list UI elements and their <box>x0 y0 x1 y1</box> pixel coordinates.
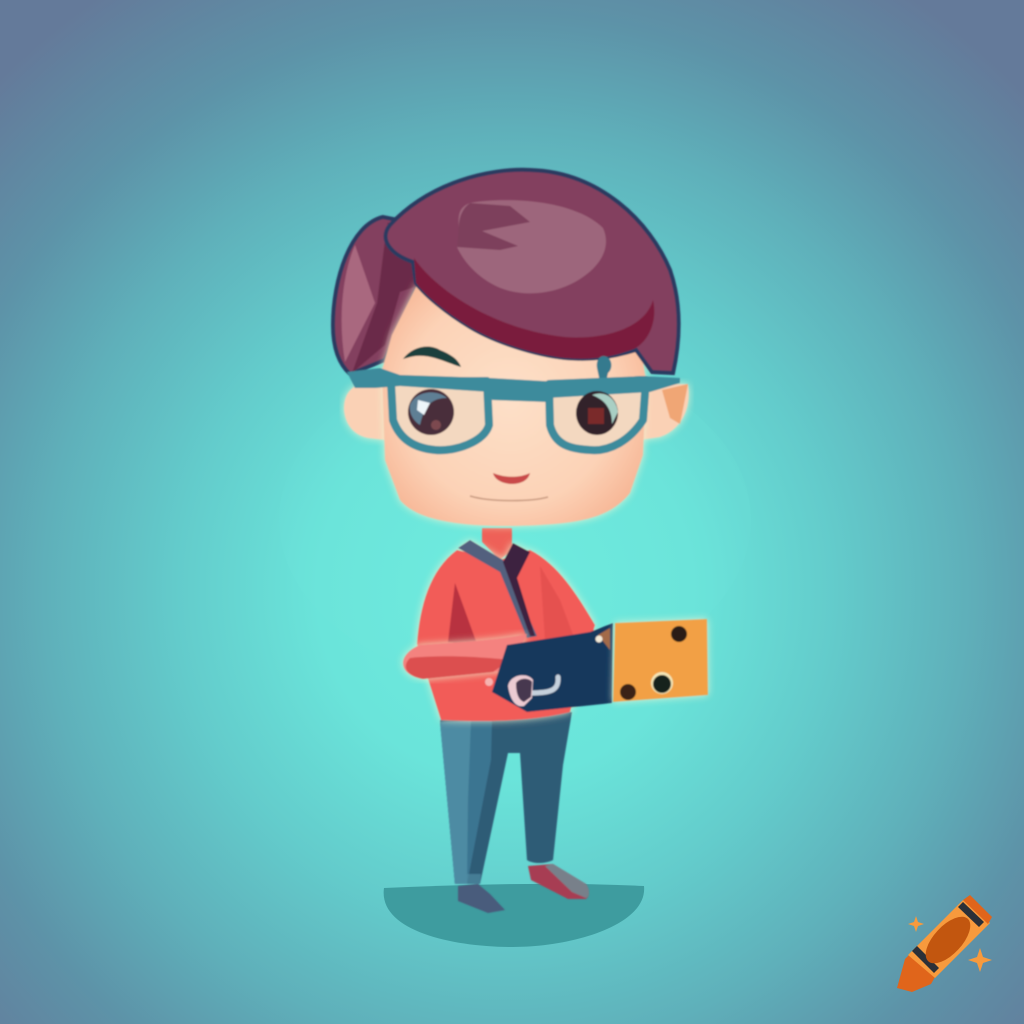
ear right <box>640 384 689 440</box>
top bar and bridge <box>347 368 680 402</box>
legs and trousers <box>440 712 572 884</box>
crayon end cap <box>963 895 992 924</box>
crayon body <box>908 900 990 978</box>
device clip rivet <box>596 636 602 642</box>
shirt <box>417 540 595 721</box>
crayon tip <box>897 952 935 992</box>
chin line <box>470 496 548 501</box>
right eye <box>576 391 618 435</box>
right lens <box>549 380 646 450</box>
hair highlight notch <box>457 203 530 250</box>
hair top <box>386 170 679 373</box>
hand and handle <box>485 675 558 706</box>
ground shadow <box>384 884 644 947</box>
logo: crayon <box>897 895 992 992</box>
face <box>382 283 646 526</box>
crayon bands <box>912 946 939 973</box>
board hole top <box>671 626 687 642</box>
neck <box>482 528 512 560</box>
board hole lens <box>651 672 673 694</box>
hair back lobe <box>333 217 420 374</box>
crayon oval <box>918 909 978 971</box>
hair highlight <box>457 200 606 293</box>
device clip <box>598 628 610 650</box>
left lens <box>391 381 489 450</box>
mouth <box>493 473 530 484</box>
forehead dot <box>597 356 611 382</box>
left eye <box>408 389 454 435</box>
sparkle large <box>968 948 992 972</box>
left shoe <box>458 884 505 913</box>
device: orange board <box>613 619 708 702</box>
eyebrow <box>403 347 461 367</box>
right shoe <box>528 864 589 899</box>
hair fringe shadow <box>414 258 654 359</box>
ear left <box>344 385 385 440</box>
sparkle small <box>908 916 924 932</box>
glasses <box>347 368 680 450</box>
faint glow circle behind character <box>279 355 751 685</box>
device: navy cover <box>492 623 613 712</box>
board hole bottom <box>620 684 636 700</box>
forearm <box>403 634 527 679</box>
character <box>333 170 708 913</box>
